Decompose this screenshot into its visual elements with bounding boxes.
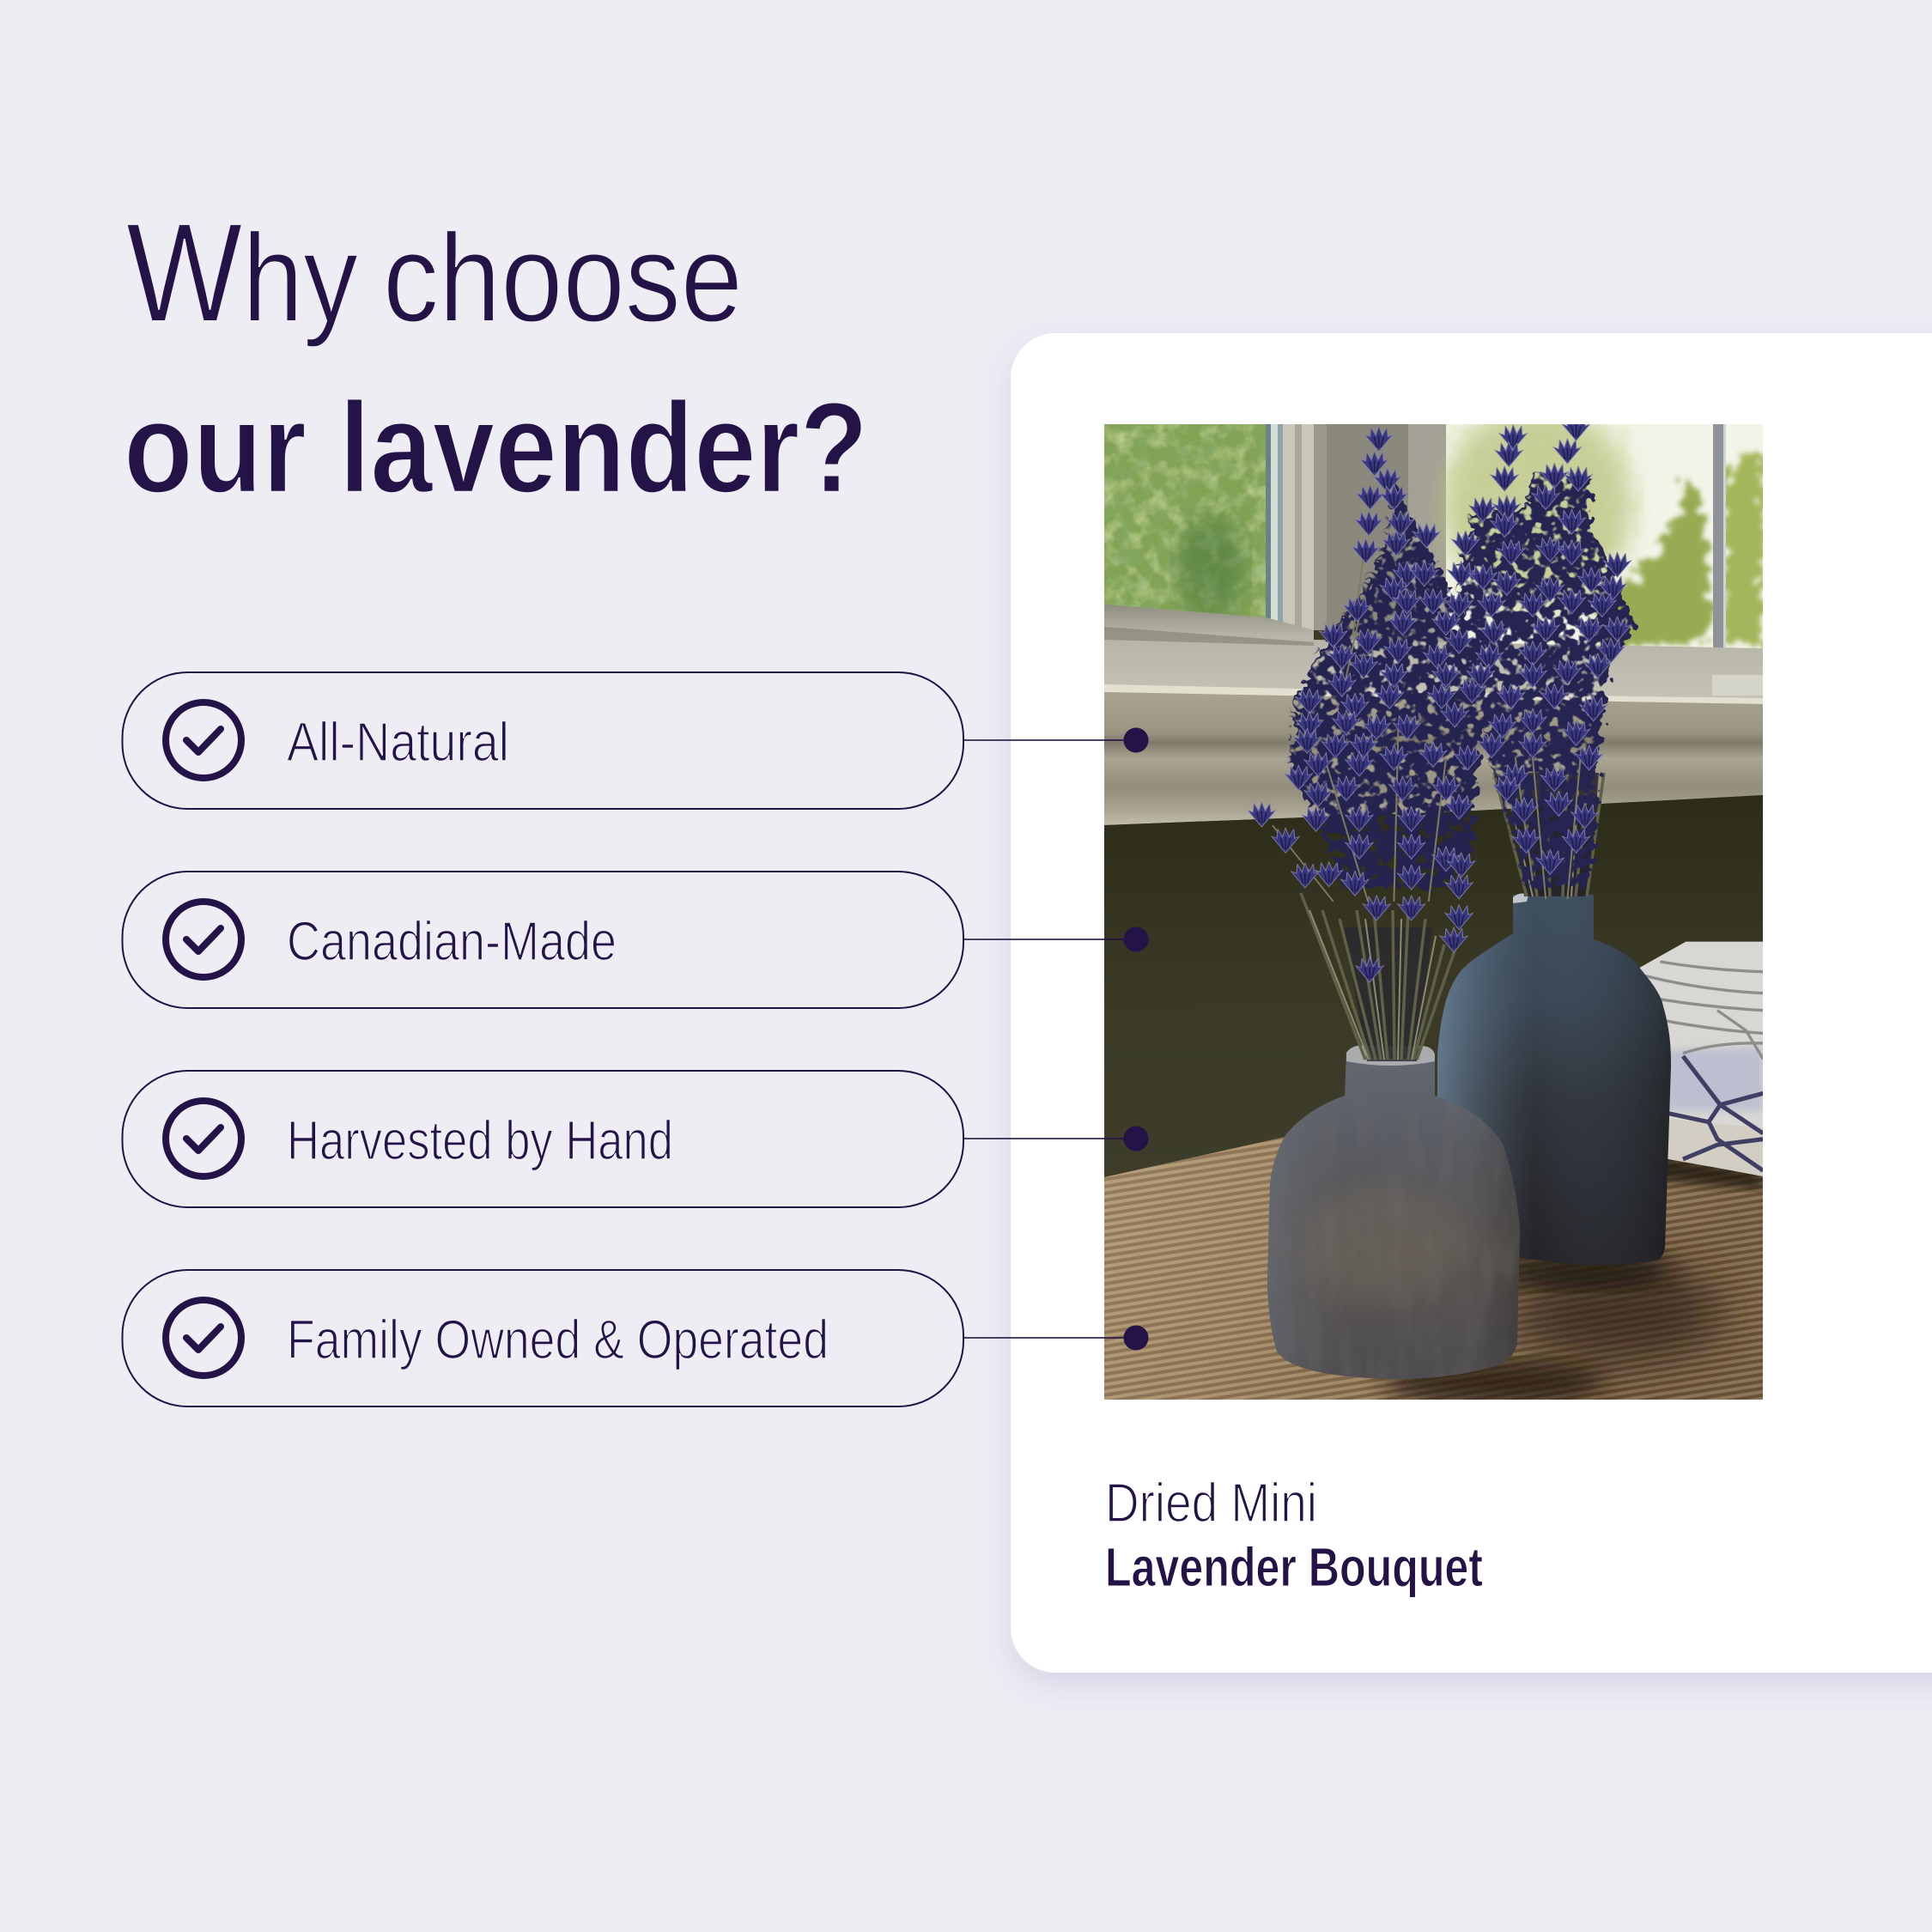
icon: check circle [166,1101,241,1176]
lavender bouquets [1248,416,1635,982]
product name [1105,1472,1483,1598]
wooden table [1104,1137,1763,1400]
window mullion and frame [1266,424,1446,647]
white sill edge [1104,684,1763,704]
pill: Harvested by Hand [122,1071,963,1207]
title: lavender? [339,375,868,519]
dark olive wall [1104,795,1763,883]
icon: check circle [166,702,241,778]
pill: All-Natural [122,672,963,809]
title: our [124,375,307,519]
stems of both bouquets [1301,773,1604,1061]
label: Family Owned & Operated: Family Owned & Operated [287,1309,829,1370]
product name: Dried Mini [1105,1472,1317,1534]
label: Harvested by Hand: Harvested by Hand [287,1109,673,1171]
product name: Lavender Bouquet [1105,1536,1483,1598]
title: Why [126,194,358,351]
crown moulding [1104,692,1763,825]
pill: Canadian-Made [122,872,963,1008]
title [124,194,868,519]
pill: Family Owned & Operated [122,1270,963,1406]
left window with trees [1104,424,1266,622]
right window with trees [1443,404,1763,649]
connector lines with dots [963,728,1149,1350]
label: Canadian-Made: Canadian-Made [287,910,617,972]
infographic canvas [122,225,1932,1693]
title: choose [383,208,743,348]
back vase [1437,894,1671,1265]
label: All-Natural: All-Natural [287,711,509,773]
speckled lavender mass [1273,473,1635,902]
right bouquet buds [1445,416,1631,874]
window sill [1104,605,1763,704]
product photo: two vases of dried lavender [1104,404,1763,1405]
panel: product card [1011,333,1932,1673]
left bouquet buds [1248,426,1485,982]
icon: check circle [166,902,241,977]
icon: check circle [166,1300,241,1376]
front vase [1267,1046,1520,1379]
folded towel [1631,942,1763,1176]
